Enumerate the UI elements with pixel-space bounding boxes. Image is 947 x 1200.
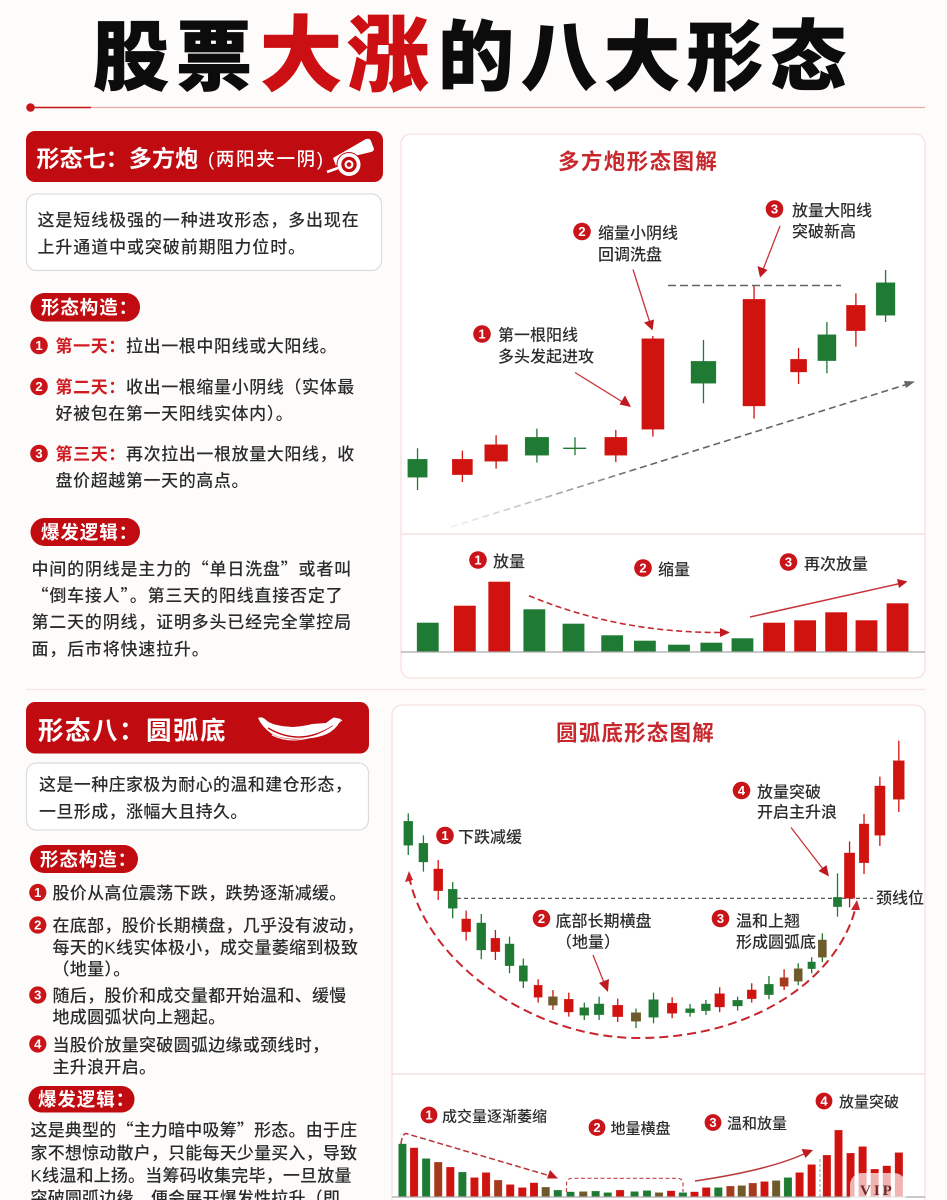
annotation 4: [733, 782, 837, 822]
volume label 4: [816, 1093, 899, 1111]
explanation paragraph: 第二天的阴线，证明多头已经完全掌控局: [32, 612, 352, 632]
title rule: [26, 103, 925, 112]
annotation 2: 回调洗盘: [598, 246, 662, 264]
annotation 3: 突破新高: [792, 223, 856, 241]
solid rising arrow: [750, 579, 908, 617]
annotation 4: 开启主升浪: [757, 802, 837, 822]
pill: 爆发逻辑: [30, 518, 140, 546]
annotation 1: 多头发起进攻: [498, 348, 594, 366]
volume label 2: 2: [593, 1120, 601, 1135]
annotation 4: 放量突破: [757, 784, 821, 802]
step 2: 收出一根缩量小阴线（实体最: [126, 377, 355, 397]
resistance dashed line: [668, 284, 841, 286]
divider between sections: [26, 688, 925, 690]
annotation 3: 放量大阳线: [792, 202, 872, 220]
intro box: [26, 763, 368, 830]
volume bars: [417, 582, 908, 652]
volume label 2: 缩量: [658, 561, 690, 579]
dashed shrink arrow: [401, 1134, 558, 1178]
annotation 2: 缩量小阴线: [598, 224, 678, 242]
neckline label: 颈线位: [876, 888, 924, 908]
title: 大涨: [260, 11, 434, 102]
arrow 2: [633, 270, 654, 330]
pill: 爆发逻辑: 爆发逻辑：: [38, 1089, 135, 1110]
pill: 爆发逻辑: 爆发逻辑：: [41, 522, 138, 543]
step 4: 4: [34, 1037, 42, 1052]
volume breakout marker: [819, 1159, 821, 1197]
step 3: 盘价超越第一天的高点。: [56, 472, 249, 490]
volume label 2: [634, 559, 690, 579]
low volume bracket: [566, 1178, 683, 1192]
annotation 2: 2: [538, 911, 545, 926]
panel: 多方炮 diagram: [401, 134, 925, 678]
dashed shrink arrow: [529, 596, 730, 637]
title: [93, 11, 853, 102]
explanation paragraph: 面，后市将快速拉升。: [32, 639, 210, 659]
annotation 1: 下跌减缓: [458, 828, 522, 846]
volume label 3: 3: [709, 1115, 717, 1130]
step 4: 主升浪开启。: [52, 1057, 156, 1077]
arrow 1: [575, 372, 631, 407]
step 3: 3: [35, 446, 43, 461]
step 2: 好被包在第一天阳线实体内）。: [56, 404, 293, 424]
annotation 2: 底部长期横盘: [556, 912, 652, 930]
heading: 形态八 圆弧底: 形态八：圆弧底: [38, 718, 227, 746]
step 3: [29, 986, 347, 1027]
explanation paragraph: [32, 555, 352, 659]
volume label 4: 放量突破: [839, 1093, 899, 1111]
rising curve arrow: [695, 1149, 813, 1181]
pill: 形态构造: [30, 293, 140, 322]
arrow 4: [791, 828, 829, 876]
chart title: 圆弧底形态图解: [556, 720, 715, 746]
step 3: 3: [34, 988, 41, 1003]
chart title: 多方炮形态图解: [558, 149, 718, 174]
step 1: 股价从高位震荡下跌，跌势逐渐减缓。: [52, 883, 347, 903]
step 1: 第一天：: [56, 336, 126, 356]
icon: rounded bottom: [258, 717, 342, 740]
explanation paragraph: “倒车接人”。第三天的阳线直接否定了: [32, 582, 343, 606]
explanation paragraph: [30, 1116, 357, 1200]
icon: cannon: [327, 139, 374, 177]
panel: 形态八 text column: [26, 702, 369, 1200]
annotation 3: [712, 910, 816, 952]
volume label 3: 再次放量: [804, 556, 868, 574]
annotation 1: [473, 325, 594, 366]
annotation 3: 温和上翘: [736, 912, 800, 930]
step 4: 当股价放量突破圆弧边缘或颈线时，: [52, 1036, 329, 1055]
volume label 1: 1: [474, 553, 482, 568]
pill: 形态构造: [30, 845, 138, 873]
step 1: 1: [35, 338, 43, 353]
step 3: 第三天：: [56, 444, 126, 464]
panel: 圆弧底 diagram: [392, 705, 925, 1200]
annotation 1: 第一根阳线: [498, 326, 578, 344]
step 2: 2: [34, 918, 41, 933]
trend arrow: [451, 381, 915, 527]
candlestick chart: [408, 270, 895, 490]
heading: 形态八 圆弧底: [26, 702, 369, 754]
step 2: [29, 916, 364, 979]
annotation 4: 4: [738, 783, 746, 798]
explanation paragraph: K线温和上扬。当筹码收集完毕，一旦放量: [30, 1166, 352, 1186]
intro box: 一旦形成，涨幅大且持久。: [39, 802, 248, 822]
annotation 3: 3: [771, 202, 778, 217]
step 1: 拉出一根中阳线或大阳线。: [126, 336, 337, 356]
volume bars: [399, 1130, 903, 1197]
intro box: 这是短线极强的一种进攻形态，多出现在: [38, 211, 360, 230]
step 1: 1: [34, 885, 41, 900]
annotation 3: [766, 200, 872, 241]
step 3: 随后，股价和成交量都开始温和、缓慢: [52, 986, 347, 1006]
step 3: 再次拉出一根放量大阳线，收: [126, 444, 355, 464]
step 2: [30, 377, 355, 424]
rounded bottom dashed arc: [405, 871, 860, 1038]
pill: 形态构造: 形态构造：: [40, 849, 137, 870]
explanation paragraph: 家不想惊动散户，只能每天少量买入，导致: [30, 1143, 357, 1163]
volume label 1: 放量: [493, 553, 525, 571]
volume label 4: 4: [820, 1094, 828, 1109]
step 4: [29, 1035, 329, 1077]
volume label 2: [589, 1119, 671, 1138]
heading: 形态七 多方炮: 形态七：多方炮: [36, 146, 198, 172]
step 2: （地量）。: [52, 960, 130, 979]
panel: 形态七 text column: [26, 131, 383, 659]
intro box: 上升通道中或突破前期阻力位时。: [38, 237, 306, 257]
volume label 1: 成交量逐渐萎缩: [442, 1108, 547, 1126]
step 2: 每天的K线实体极小，成交量萎缩到极致: [52, 938, 358, 958]
annotation 3: 形成圆弧底: [736, 934, 816, 952]
watermark: VIP: [860, 1183, 895, 1199]
arrow 3: [758, 226, 780, 278]
intro box: 这是一种庄家极为耐心的温和建仓形态，: [39, 774, 352, 794]
title: 股票: [93, 16, 259, 101]
arrow 2: [593, 955, 609, 992]
annotation 2: [533, 910, 652, 952]
annotation 1: [436, 827, 522, 846]
step 3: 地成圆弧状向上翘起。: [52, 1008, 226, 1027]
annotation 2: [573, 223, 678, 264]
neckline: [457, 897, 873, 899]
volume label 3: [780, 553, 868, 574]
volume label 2: 2: [639, 561, 647, 576]
volume label 1: 1: [425, 1108, 433, 1123]
volume label 3: [705, 1114, 787, 1132]
step 3: [30, 444, 355, 490]
volume label 1: [469, 551, 525, 571]
annotation 1: 1: [441, 828, 449, 843]
step 1: [30, 336, 337, 356]
heading: 形态七 多方炮: (两阳夹一阴): [208, 148, 325, 170]
volume label 3: 温和放量: [727, 1116, 787, 1132]
annotation 2: 2: [578, 224, 586, 239]
heading: 形态七 多方炮: [26, 131, 383, 182]
explanation paragraph: 中间的阴线是主力的“单日洗盘”或者叫: [32, 555, 352, 580]
annotation 2: （地量）: [556, 934, 620, 952]
volume label 3: 3: [785, 555, 792, 570]
annotation 1: 1: [478, 327, 486, 342]
pill: 形态构造: 形态构造：: [41, 297, 138, 318]
annotation 3: 3: [717, 911, 724, 926]
watermark: [850, 1173, 906, 1200]
explanation paragraph: 这是典型的“主力暗中吸筹”形态。由于庄: [30, 1116, 357, 1141]
step 2: 第二天：: [56, 377, 126, 397]
title: 的八大形态: [438, 16, 853, 101]
candlestick chart: [404, 741, 904, 1028]
intro box: [26, 194, 382, 270]
volume label 2: 地量横盘: [610, 1120, 671, 1138]
step 2: 在底部，股价长期横盘，几乎没有波动，: [52, 916, 364, 936]
step 2: 2: [35, 379, 43, 394]
